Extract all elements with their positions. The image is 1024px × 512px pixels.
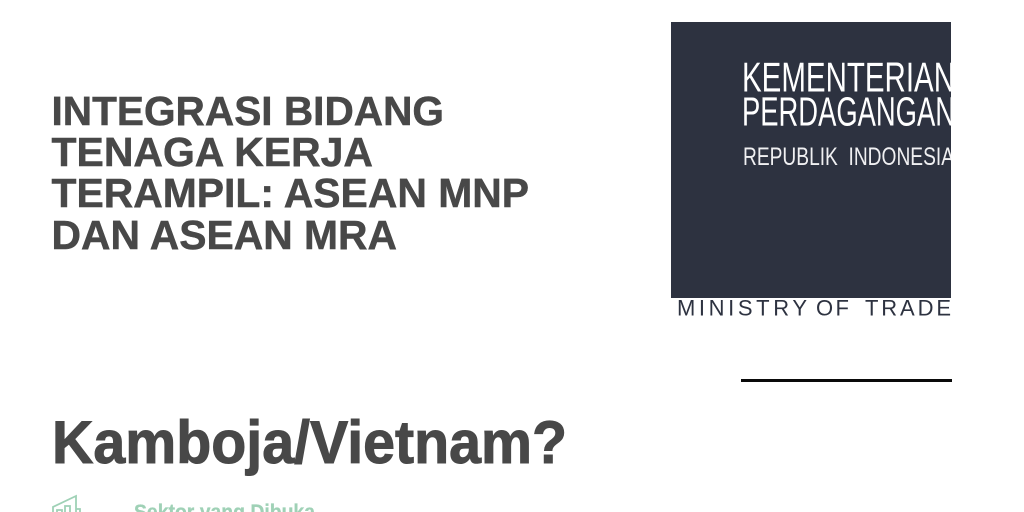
title: INTEGRASI BIDANG: [52, 88, 444, 134]
title: TERAMPIL: ASEAN MNP: [52, 170, 529, 216]
logo tagline: [677, 296, 951, 320]
title: TENAGA KERJA: [52, 129, 373, 175]
logo tagline: TRADE: [865, 296, 951, 320]
logo: Kementerian Perdagangan: [671, 22, 955, 320]
logo panel: [671, 22, 951, 298]
icon: open sector building: [53, 496, 80, 512]
title: [52, 88, 529, 258]
logo tagline: MINISTRY: [677, 296, 807, 320]
divider line: [741, 379, 952, 382]
logo tagline: OF: [816, 296, 849, 320]
logo wordmark: [744, 62, 951, 165]
title: DAN ASEAN MRA: [52, 212, 397, 258]
logo wordmark: REPUBLIK INDONESIA: [743, 143, 954, 171]
heading: Kamboja/Vietnam?: Kamboja/Vietnam?: [52, 409, 567, 476]
